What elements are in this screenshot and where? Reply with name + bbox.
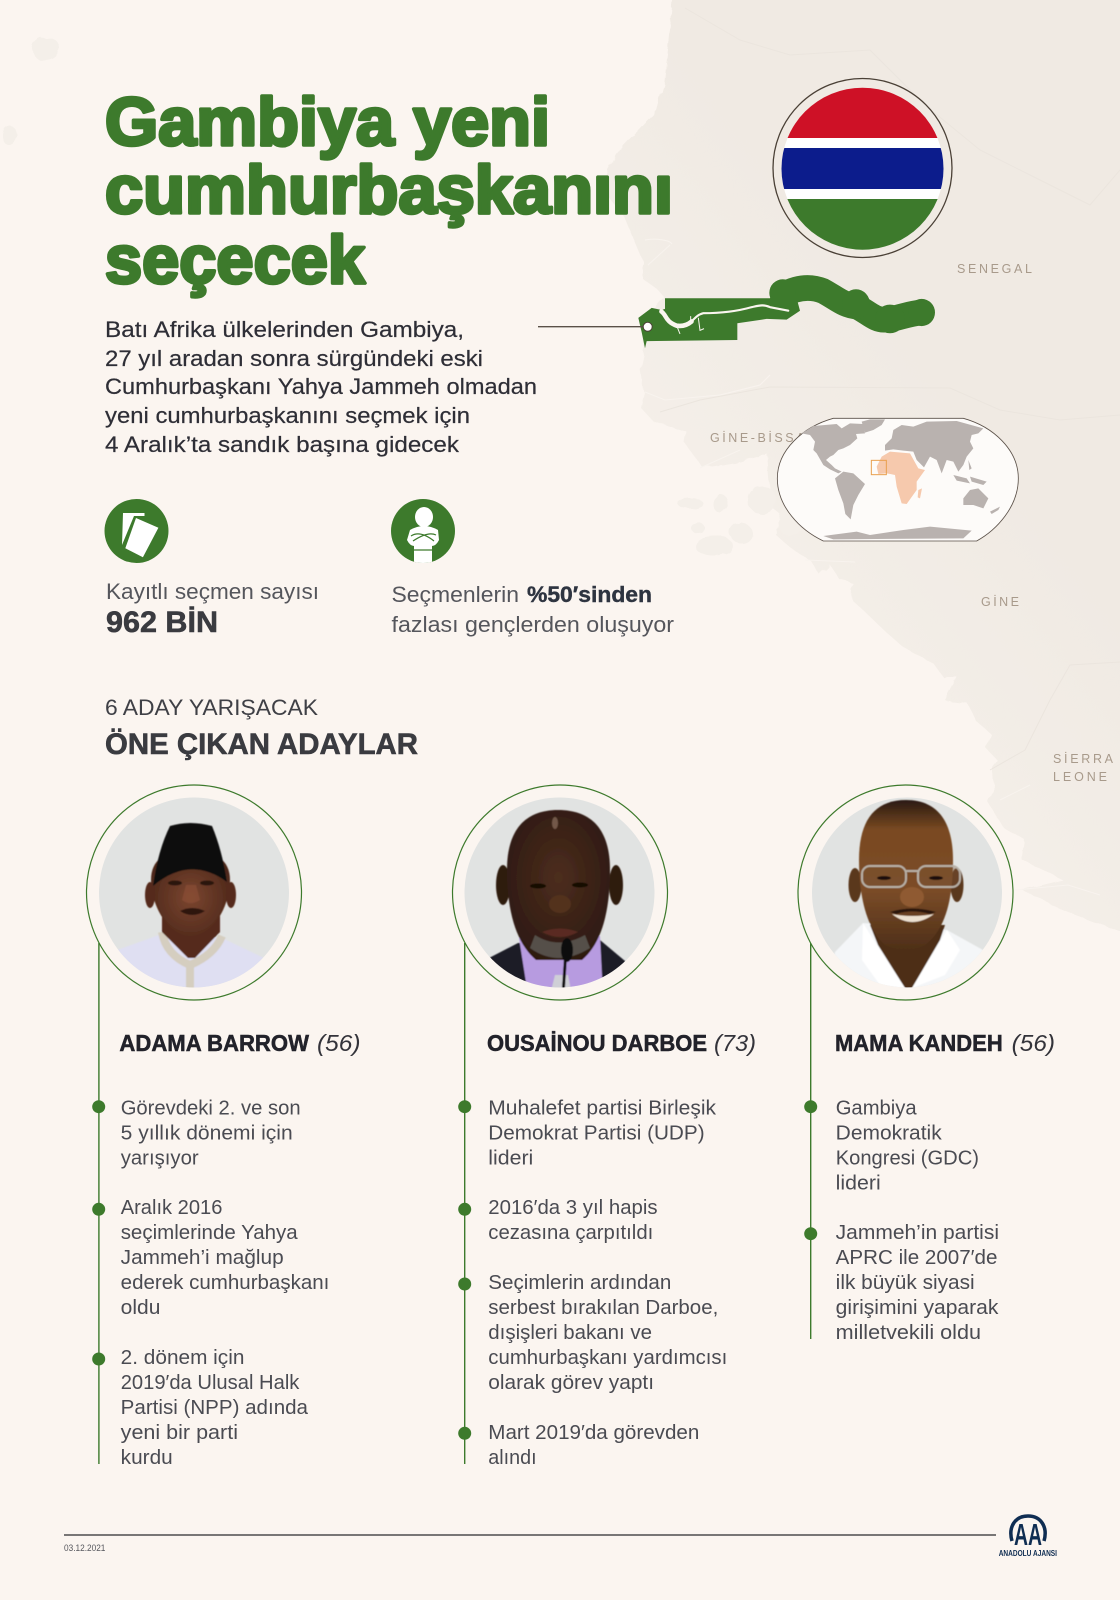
map label: Gine: GİNE — [981, 595, 1019, 609]
bullet: current term — [92, 1096, 301, 1169]
bullet: new party: 2. dönem için — [121, 1346, 244, 1369]
bullet: dismissed: Mart 2019′da görevden — [488, 1421, 699, 1444]
bullet: 2016 election — [92, 1196, 329, 1319]
logo: Anadolu Ajansi — [999, 1516, 1057, 1558]
title: Gambiya yeni — [105, 84, 550, 160]
bullet: UDP leader — [458, 1096, 717, 1169]
bullet: APRC career: ilk büyük siyasi — [836, 1271, 975, 1294]
bullet: 2016 election: seçimlerinde Yahya — [121, 1221, 298, 1244]
intro paragraph: Cumhurbaşkanı Yahya Jammeh olmadan — [105, 374, 537, 399]
bullet: GDC leader: Demokratik — [836, 1121, 942, 1144]
portrait: Mama Kandeh — [798, 785, 1013, 1000]
name: (56) — [317, 1030, 360, 1056]
intro paragraph: 4 Aralık’ta sandık başına gidecek — [105, 432, 460, 457]
intro paragraph: Batı Afrika ülkelerinden Gambiya, — [105, 317, 464, 342]
stat: registered voters: Kayıtlı seçmen sayısı — [106, 579, 319, 604]
bullet: new party: kurdu — [121, 1446, 173, 1469]
name: OUSAİNOU DARBOE — [487, 1030, 707, 1056]
icon: young person with crossed arms — [391, 499, 455, 565]
intro paragraph: 27 yıl aradan sonra sürgündeki eski — [105, 346, 483, 371]
bullet: prison sentence: cezasına çarpıtıldı — [488, 1221, 653, 1244]
bullet: released and served: Seçimlerin ardından — [488, 1271, 671, 1294]
bullet: current term: yarışıyor — [121, 1146, 199, 1169]
bullet: new party: Partisi (NPP) adında — [121, 1396, 309, 1419]
bullet: released and served: dışişleri bakanı ve — [488, 1321, 652, 1344]
logo: Anadolu Ajansi: ANADOLU AJANSI — [999, 1549, 1057, 1558]
bullet: UDP leader: lideri — [488, 1146, 533, 1169]
bullet: released and served: serbest bırakılan Darboe, — [488, 1296, 718, 1319]
icon: Gambia flag circle — [773, 78, 952, 258]
bullet: dismissed — [458, 1421, 699, 1469]
candidate panel: Ousainou Darboe — [452, 785, 756, 1469]
bullet: 2016 election: Jammeh’i mağlup — [121, 1246, 284, 1269]
bullet: GDC leader: Gambiya — [836, 1096, 917, 1119]
name: ADAMA BARROW — [119, 1030, 309, 1056]
section heading: ÖNE ÇIKAN ADAYLAR — [105, 728, 418, 761]
name: (73) — [714, 1030, 756, 1056]
intro paragraph — [105, 317, 537, 457]
bullet: new party: 2019′da Ulusal Halk — [121, 1371, 300, 1394]
logo: Anadolu Ajansi: AA — [1014, 1517, 1042, 1552]
bullet: 2016 election: Aralık 2016 — [121, 1196, 222, 1219]
stat: registered voters — [106, 579, 319, 639]
stat: youth share of voters: %50′sinden — [527, 582, 652, 607]
bullet: 2016 election: oldu — [121, 1296, 160, 1319]
bullet: current term: Görevdeki 2. ve son — [121, 1096, 301, 1119]
bullet: prison sentence — [458, 1196, 658, 1244]
bullet: current term: 5 yıllık dönemi için — [121, 1121, 293, 1144]
bullet: GDC leader — [804, 1096, 979, 1194]
title: cumhurbaşkanını — [105, 152, 673, 228]
portrait: Adama Barrow — [86, 785, 302, 1000]
stat: youth share of voters — [392, 582, 674, 637]
title: seçecek — [105, 222, 365, 298]
title — [105, 84, 673, 298]
bullet: new party — [92, 1346, 309, 1469]
map label: Gine-Bissau: GİNE-BİSSAU — [710, 431, 816, 445]
bullet: GDC leader: lideri — [836, 1171, 881, 1194]
bullet: dismissed: alındı — [488, 1446, 537, 1469]
timeline line — [98, 943, 100, 1464]
intro paragraph: yeni cumhurbaşkanını seçmek için — [105, 403, 470, 428]
name: MAMA KANDEH — [835, 1030, 1003, 1056]
name: (56) — [1012, 1030, 1055, 1056]
stat: youth share of voters: fazlası gençlerden oluşuyor — [392, 612, 674, 637]
world locator map — [777, 418, 1018, 541]
bullet: APRC career: APRC ile 2007′de — [836, 1246, 997, 1269]
bullet: APRC career: Jammeh’in partisi — [836, 1221, 999, 1244]
bullet: released and served: olarak görev yaptı — [488, 1371, 654, 1394]
icon: ballot papers — [104, 499, 168, 563]
section heading — [105, 695, 418, 761]
map label: Sierra Leone: LEONE — [1053, 770, 1107, 784]
bullet: APRC career: girişimini yaparak — [836, 1296, 999, 1319]
map: Gambia territory with capital marker — [538, 279, 935, 348]
bullet: released and served — [458, 1271, 727, 1394]
bullet: UDP leader: Demokrat Partisi (UDP) — [488, 1121, 705, 1144]
footer rule — [64, 1534, 996, 1536]
bullet: released and served: cumhurbaşkanı yardımcısı — [488, 1346, 727, 1369]
bullet: new party: yeni bir parti — [121, 1421, 238, 1444]
bullet: UDP leader: Muhalefet partisi Birleşik — [488, 1096, 717, 1119]
background map of West Africa — [3, 0, 1120, 935]
date: 03.12.2021 — [64, 1543, 105, 1553]
bullet: GDC leader: Kongresi (GDC) — [836, 1146, 979, 1169]
map label: Senegal: SENEGAL — [957, 262, 1032, 276]
bullet: APRC career: milletvekili oldu — [836, 1321, 981, 1344]
candidate panel: Adama Barrow — [86, 785, 360, 1469]
timeline line — [810, 943, 812, 1339]
stat: youth share of voters: Seçmenlerin — [392, 582, 519, 607]
bullet: prison sentence: 2016′da 3 yıl hapis — [488, 1196, 658, 1219]
bullet: 2016 election: ederek cumhurbaşkanı — [121, 1271, 329, 1294]
map label: Sierra Leone: SİERRA — [1053, 752, 1114, 766]
section heading: 6 ADAY YARIŞACAK — [105, 695, 318, 720]
bullet: APRC career — [804, 1221, 999, 1344]
timeline line — [464, 943, 466, 1464]
map label: Sierra Leone — [1053, 752, 1114, 784]
stat: registered voters: 962 BİN — [106, 606, 218, 639]
candidate panel: Mama Kandeh — [798, 785, 1055, 1344]
portrait: Ousainou Darboe — [452, 785, 668, 1000]
